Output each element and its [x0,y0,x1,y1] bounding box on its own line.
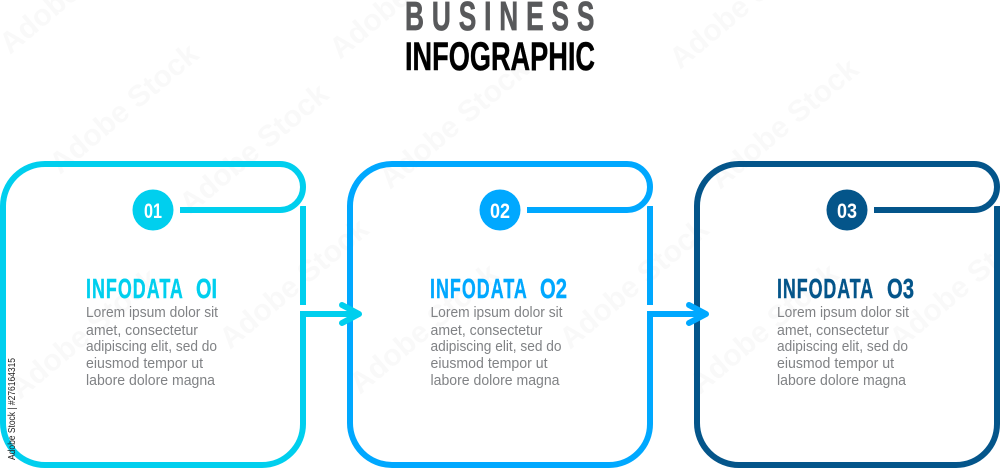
watermarks: Adobe Stock [43,37,205,180]
body text 2: adipiscing elit, sed do [430,338,562,355]
body text 1: Lorem ipsum dolor sit [86,304,219,321]
heading: infodata 03 [777,273,914,304]
heading: infodata 02: O2 [540,273,567,304]
body text 2: labore dolore magna [430,372,560,389]
body text 2: Lorem ipsum dolor sit [430,304,563,321]
watermarks: Adobe Stock [173,77,335,220]
stock id: Adobe Stock | #276164315 [7,358,18,460]
badge 01: 01 [144,200,162,223]
body text 1 [86,304,219,389]
arrow 2 to 3 [647,305,706,323]
watermarks: Adobe Stock [683,257,845,400]
body text 3: amet, consectetur [777,322,889,339]
heading: infographic: INFOGRAPHIC [405,35,595,79]
heading: infodata 01: INFODATA [86,273,183,304]
heading: infodata 03: INFODATA [777,273,873,304]
body text 3: labore dolore magna [777,372,907,389]
heading: infodata 02: INFODATA [430,273,527,304]
watermarks: Adobe Stock [373,52,535,195]
body text 2: eiusmod tempor ut [430,355,548,372]
panel: step 3 [697,164,997,465]
watermarks: Adobe Stock [213,212,375,355]
panel: step 2 [350,164,650,465]
body text 1: labore dolore magna [86,372,216,389]
watermarks: Adobe Stock [553,212,715,355]
arrow 1 to 2 [300,305,359,323]
body text 2 [430,304,563,389]
body text 3: eiusmod tempor ut [777,355,895,372]
body text 2: amet, consectetur [430,322,542,339]
watermarks: Adobe Stock [703,52,865,195]
watermarks: Adobe Stock [3,262,165,405]
body text 3: Lorem ipsum dolor sit [777,304,910,321]
badge 03 [826,190,868,230]
body text 1: amet, consectetur [86,322,198,339]
badge 01 [132,190,174,230]
watermarks: Adobe Stock [343,257,505,400]
card outline 3 [697,164,997,465]
title [405,0,595,79]
badge 03: 03 [837,200,857,223]
body text 1: adipiscing elit, sed do [86,338,217,355]
heading: infodata 01: OI [196,273,217,304]
badge 02: 02 [490,200,510,223]
body text 1: eiusmod tempor ut [86,355,204,372]
badge 02 [480,190,520,230]
card outline 1 [3,164,303,465]
body text 3: adipiscing elit, sed do [777,338,908,355]
panel: step 1 [3,164,303,465]
card outline 2 [350,164,650,465]
body text 3 [777,304,910,389]
heading: infodata 03: O3 [887,273,914,304]
